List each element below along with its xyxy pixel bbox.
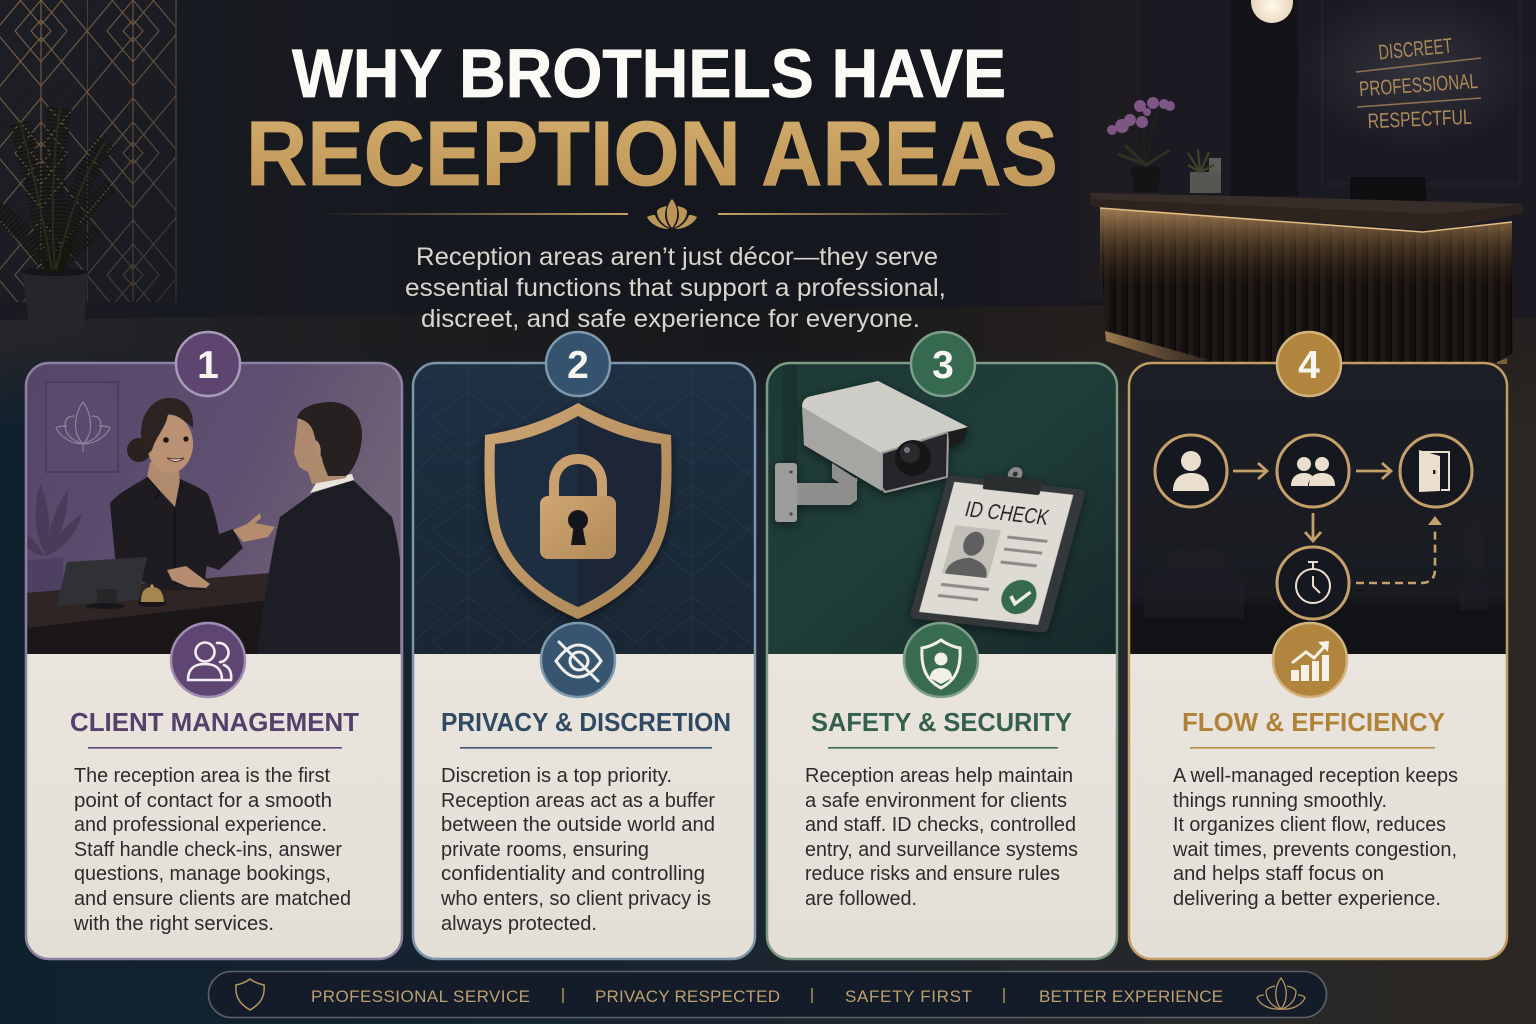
step: person (1155, 435, 1227, 507)
footer labels (311, 987, 1223, 1006)
body text: always protected. (441, 913, 597, 935)
reception desk scene (1080, 0, 1536, 364)
icon: shield with person (904, 623, 978, 697)
body text: a safe environment for clients (805, 790, 1067, 812)
body text: Reception areas act as a buffer (441, 790, 715, 812)
body text: confidentiality and controlling (441, 863, 705, 885)
number badge 4 (1277, 332, 1341, 396)
illustration: receptionist greeting client (18, 362, 403, 654)
footer labels: BETTER EXPERIENCE (1039, 987, 1223, 1006)
card border (413, 363, 755, 959)
body text: questions, manage bookings, (74, 863, 331, 885)
arrow (1233, 463, 1267, 479)
body text (805, 765, 1078, 910)
body text: things running smoothly. (1173, 790, 1387, 812)
body text: and ensure clients are matched (74, 888, 351, 910)
number badge 3: 3 (932, 344, 954, 387)
faint armchair (1144, 608, 1244, 618)
clipboard (909, 460, 1090, 633)
wall sign: DISCREET (1377, 35, 1453, 65)
body text: reduce risks and ensure rules (805, 863, 1060, 885)
card border (1129, 363, 1507, 959)
footer bar (208, 972, 1326, 1018)
body text: A well-managed reception keeps (1173, 765, 1458, 787)
icon: rising bars (1273, 623, 1347, 697)
subtitle (405, 243, 946, 333)
security camera (775, 381, 968, 522)
number badge 1 (176, 332, 240, 396)
body text: The reception area is the first (74, 765, 330, 787)
glowing led strip (1100, 208, 1512, 232)
subtitle: essential functions that support a professional, (405, 274, 946, 302)
body text: and professional experience. (74, 814, 327, 836)
number badge 4: 4 (1298, 344, 1320, 387)
heading: client management: CLIENT MANAGEMENT (70, 707, 359, 737)
flow diagram (1128, 362, 1508, 654)
wall sign: PROFESSIONAL (1358, 70, 1479, 101)
number badge 1: 1 (197, 344, 219, 387)
body text: Reception areas help maintain (805, 765, 1073, 787)
desk monitor (1350, 177, 1427, 202)
icon: people (171, 623, 245, 697)
title: WHY BROTHELS HAVE (292, 35, 1006, 112)
footer labels: SAFETY FIRST (845, 987, 972, 1006)
title (246, 35, 1058, 205)
step: door (1400, 435, 1472, 507)
icon: footer lotus (1257, 978, 1305, 1009)
arrow (1356, 463, 1391, 479)
footer labels: PRIVACY RESPECTED (595, 987, 780, 1006)
service bell (138, 584, 166, 607)
dark door column (1230, 0, 1298, 196)
body text (73, 765, 351, 935)
wall sign: RESPECTFUL (1367, 106, 1472, 133)
id photo (942, 525, 1001, 578)
small succulent in box (1188, 149, 1221, 193)
card border (767, 363, 1117, 959)
arrow down (1305, 513, 1321, 541)
heading: safety and security: SAFETY & SECURITY (811, 707, 1072, 737)
body text: are followed. (805, 888, 917, 910)
decorative gold geometric wall panel (0, 0, 176, 302)
body text: private rooms, ensuring (441, 839, 649, 861)
counter (27, 573, 269, 628)
background plant (27, 484, 82, 592)
title divider with lotus (318, 199, 1020, 229)
dashed return arrow (1356, 516, 1442, 583)
subtitle: discreet, and safe experience for everyone. (421, 305, 920, 333)
faint plant (1460, 608, 1488, 610)
panel: flow and efficiency (1128, 332, 1508, 960)
panel: safety and security (766, 332, 1118, 960)
panel: privacy and discretion (412, 332, 756, 960)
footer labels: PROFESSIONAL SERVICE (311, 987, 530, 1006)
wall moulding frame (1322, 0, 1520, 184)
icon: hidden eye (541, 623, 615, 697)
body text: wait times, prevents congestion, (1172, 839, 1457, 861)
body text: and staff. ID checks, controlled (805, 814, 1076, 836)
desk lower light strip (1105, 331, 1210, 360)
body text: Discretion is a top priority. (441, 765, 672, 787)
wall sign (1356, 35, 1481, 133)
client in suit (257, 402, 400, 654)
body text: between the outside world and (441, 814, 715, 836)
padlock (540, 459, 616, 559)
body text: point of contact for a smooth (74, 790, 332, 812)
framed lotus art (46, 382, 118, 472)
step: stopwatch (1277, 547, 1349, 619)
subtitle: Reception areas aren’t just décor—they serve (416, 243, 938, 271)
body text: with the right services. (73, 913, 274, 935)
number badge 2: 2 (567, 344, 589, 387)
heading: flow and efficiency: FLOW & EFFICIENCY (1182, 707, 1445, 737)
illustration: camera and id check (766, 362, 1118, 654)
shield (484, 403, 672, 619)
body text: and helps staff focus on (1173, 863, 1384, 885)
potted palm plant (0, 108, 110, 338)
panel: client management (18, 332, 403, 960)
check badge (1001, 580, 1037, 614)
icon: footer shield (236, 979, 264, 1010)
body text: who enters, so client privacy is (440, 888, 711, 910)
body text: It organizes client flow, reduces (1173, 814, 1446, 836)
card border (26, 363, 402, 959)
background: dark lobby wall and floor (0, 305, 1536, 1024)
monitor (57, 557, 147, 609)
title: RECEPTION AREAS (246, 103, 1058, 205)
body text (440, 765, 715, 935)
body text: entry, and surveillance systems (805, 839, 1078, 861)
number badge 2 (546, 332, 610, 396)
receptionist (110, 398, 275, 590)
body text: delivering a better experience. (1173, 888, 1441, 910)
body text (1172, 765, 1458, 910)
id check label: ID CHECK (962, 497, 1052, 530)
pendant lamp (1251, 0, 1293, 23)
orchid in pot (1107, 97, 1175, 192)
desk front fluted panel (1100, 208, 1513, 362)
heading: privacy and discretion: PRIVACY & DISCRETION (441, 707, 731, 737)
body text: Staff handle check-ins, answer (74, 839, 342, 861)
illustration: shield with padlock (412, 362, 756, 654)
number badge 3 (911, 332, 975, 396)
back wall panels (1140, 0, 1536, 318)
step: group (1277, 435, 1349, 507)
clip (982, 466, 1043, 496)
desk top slab (1090, 193, 1523, 231)
